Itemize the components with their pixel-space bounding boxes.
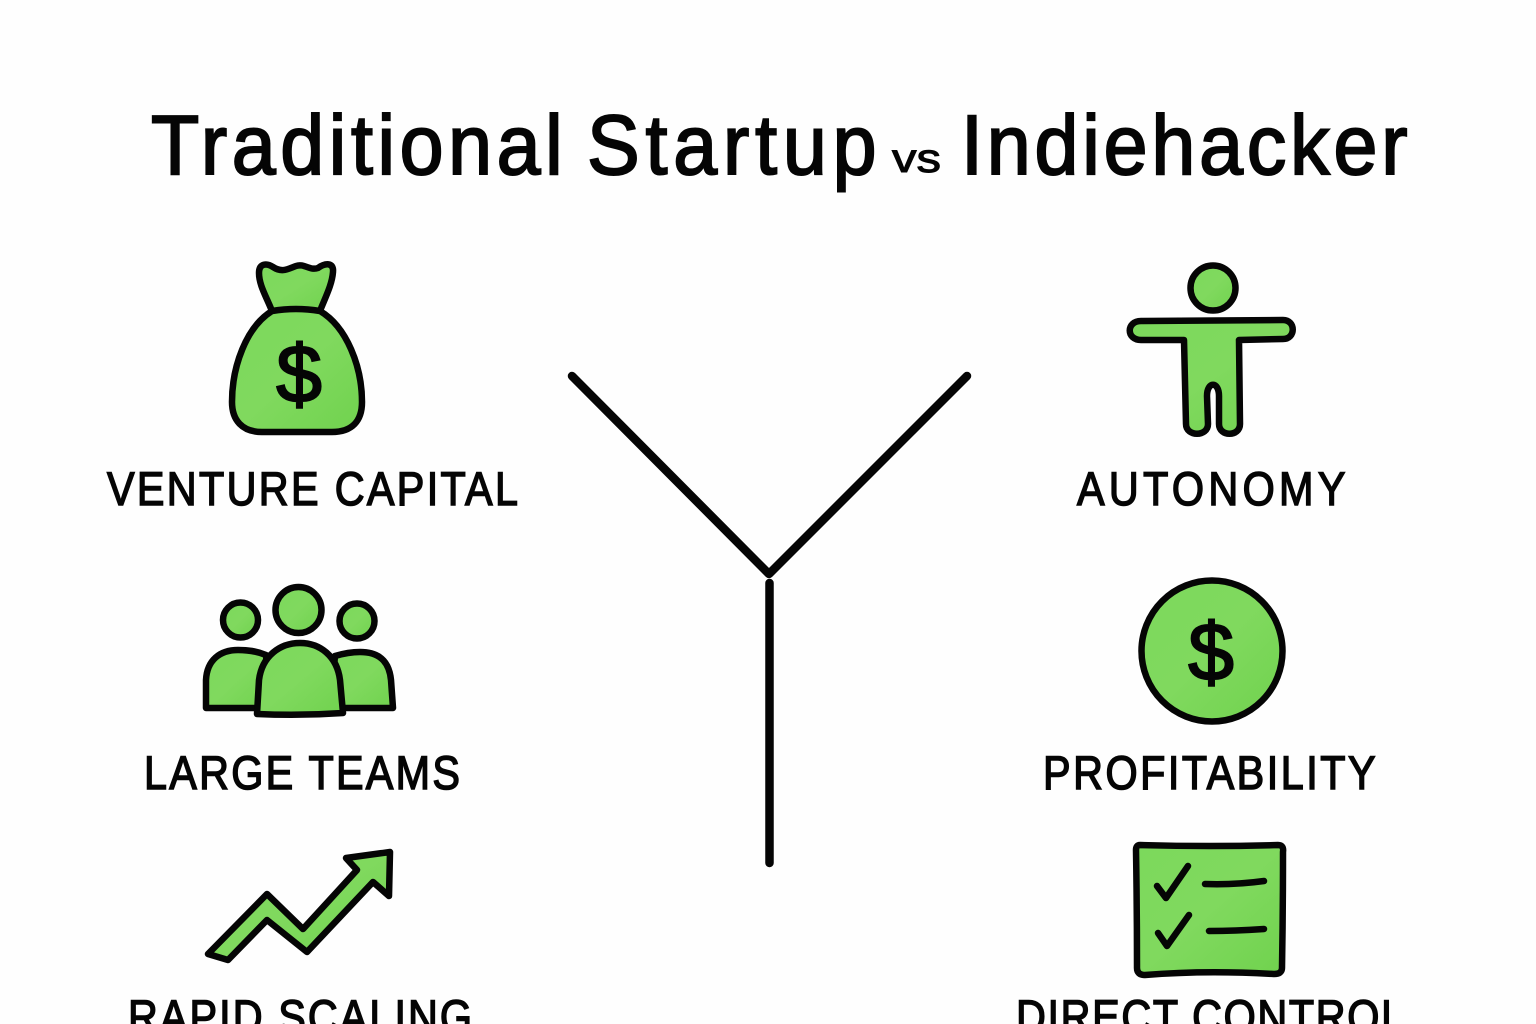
label: profitability: PROFITABILITY bbox=[1043, 748, 1376, 800]
panel: indiehacker bbox=[1016, 266, 1404, 1024]
title: Startup bbox=[587, 99, 877, 193]
label: large teams: LARGE TEAMS bbox=[144, 748, 460, 800]
panel: traditional startup bbox=[107, 264, 518, 1024]
icon: person with open arms bbox=[1130, 266, 1293, 434]
Y-shaped fork divider bbox=[572, 376, 967, 863]
label: venture capital: VENTURE CAPITAL bbox=[107, 464, 518, 516]
title: vs bbox=[892, 135, 941, 181]
icon: checklist bbox=[1136, 845, 1283, 975]
icon: large team bbox=[206, 587, 393, 715]
icon: rising arrow bbox=[208, 852, 390, 960]
title bbox=[151, 99, 1408, 193]
icon: money bag bbox=[232, 264, 362, 432]
title: Indiehacker bbox=[961, 99, 1407, 193]
icon: dollar coin bbox=[1142, 580, 1282, 722]
icon: money bag: $ bbox=[276, 329, 322, 420]
icon: dollar coin: $ bbox=[1188, 607, 1234, 698]
label: autonomy: AUTONOMY bbox=[1077, 464, 1345, 516]
title: Traditional bbox=[151, 99, 563, 193]
